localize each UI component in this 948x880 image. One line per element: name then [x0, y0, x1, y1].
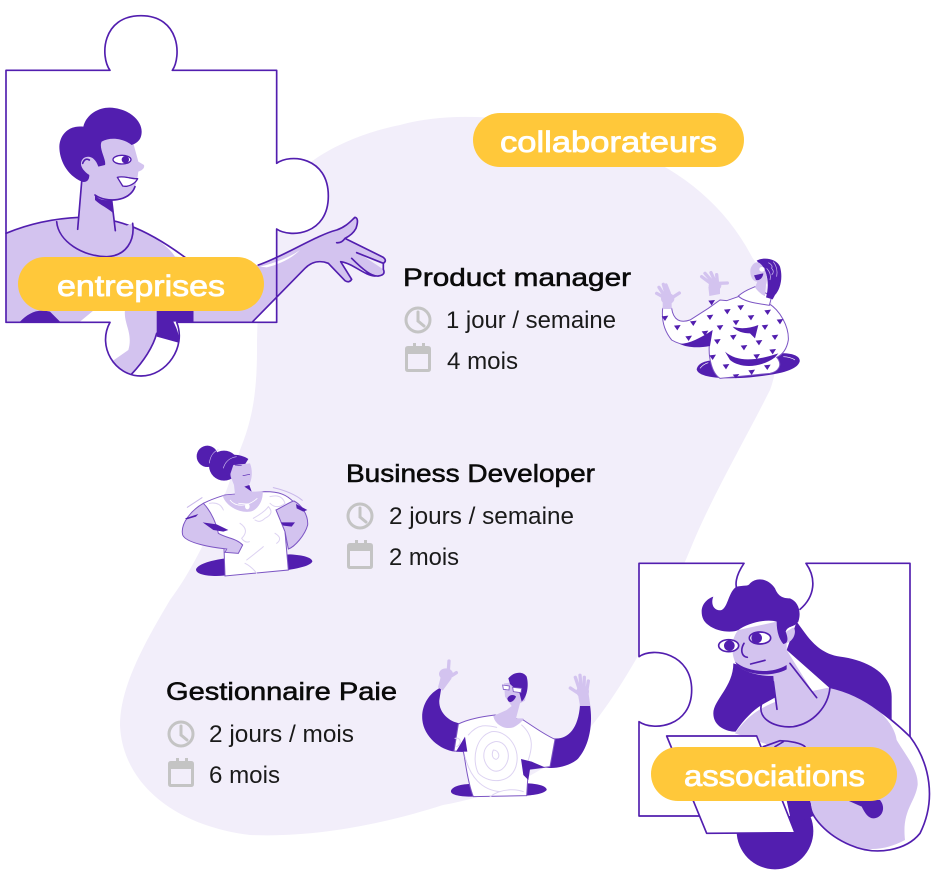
left arm — [182, 503, 243, 553]
right hand — [702, 273, 727, 296]
icon: clock — [348, 504, 372, 528]
dark sleeves — [422, 688, 591, 768]
icon: calendar — [168, 758, 194, 787]
hand on paper — [760, 741, 807, 750]
curly hair — [702, 579, 800, 644]
role: gestionnaire paie — [166, 678, 397, 789]
icon: clock — [406, 308, 430, 332]
role: gestionnaire paie: Gestionnaire Paie — [166, 678, 397, 706]
puzzle stroke — [6, 16, 328, 376]
role: product manager: 4 mois — [447, 348, 518, 375]
pill: entreprises: entreprises — [57, 270, 225, 303]
puzzle piece: associations — [639, 563, 929, 869]
neck and face — [732, 622, 817, 717]
shirt squiggles — [209, 496, 285, 573]
pill: entreprises — [18, 257, 264, 311]
puzzle outline — [6, 16, 328, 376]
outline strokes — [6, 217, 385, 374]
glasses — [503, 685, 522, 693]
raised left hand — [438, 661, 456, 691]
role: gestionnaire paie: 2 jours / mois — [209, 721, 354, 748]
shirt — [203, 492, 293, 576]
face line — [235, 465, 250, 476]
role: product manager — [403, 264, 631, 375]
head — [57, 108, 144, 257]
role: gestionnaire paie: 6 mois — [209, 762, 280, 789]
pill: associations — [651, 747, 897, 801]
triangle pattern — [662, 300, 783, 378]
icon: calendar — [347, 540, 373, 569]
dark shirt shadow — [456, 737, 545, 780]
pill: collaborateurs: collaborateurs — [500, 126, 717, 159]
pill: associations: associations — [684, 760, 865, 793]
sleeve marks — [185, 504, 307, 532]
hole — [451, 783, 547, 797]
dark folds — [680, 325, 778, 366]
person: business developer — [182, 446, 312, 576]
eyes and mouth — [749, 632, 771, 644]
body — [735, 687, 929, 851]
role: product manager: 1 jour / semaine — [446, 307, 616, 334]
person: product manager — [657, 259, 800, 378]
hole highlight — [700, 357, 795, 368]
long hair — [713, 622, 892, 732]
role: business developer — [346, 460, 595, 571]
contour lines — [455, 725, 531, 797]
shirt — [454, 715, 555, 797]
neck and collar — [493, 682, 527, 728]
role: business developer: Business Developer — [346, 460, 595, 488]
pill: collaborateurs — [473, 113, 744, 167]
role: business developer: 2 jours / semaine — [389, 503, 574, 530]
paper — [667, 736, 795, 833]
icon: clock — [169, 722, 193, 746]
dress — [662, 296, 788, 378]
hole — [697, 353, 800, 378]
dark lower knob — [737, 793, 813, 869]
person: gestionnaire paie — [422, 661, 591, 797]
right arm — [276, 501, 308, 549]
hair — [508, 673, 528, 702]
raised right hand — [570, 675, 590, 706]
puzzle piece: entreprises — [6, 16, 385, 376]
hair bun — [197, 446, 218, 467]
icon: calendar — [405, 343, 431, 372]
hole — [196, 554, 312, 576]
dark sleeve at hand — [787, 800, 883, 823]
shirt highlight — [133, 227, 300, 267]
hair — [757, 259, 781, 299]
person body — [6, 217, 385, 322]
hair waves — [767, 262, 777, 280]
background blob — [120, 117, 777, 835]
neck and collar — [223, 463, 263, 512]
role: business developer: 2 mois — [389, 544, 459, 571]
scarf — [738, 287, 772, 305]
left hand — [657, 284, 679, 309]
arm in lower knob — [112, 310, 157, 374]
role: product manager: Product manager — [403, 264, 631, 292]
dark shirt details — [20, 310, 193, 343]
puzzle outline — [639, 563, 910, 816]
neck and face — [750, 262, 767, 296]
